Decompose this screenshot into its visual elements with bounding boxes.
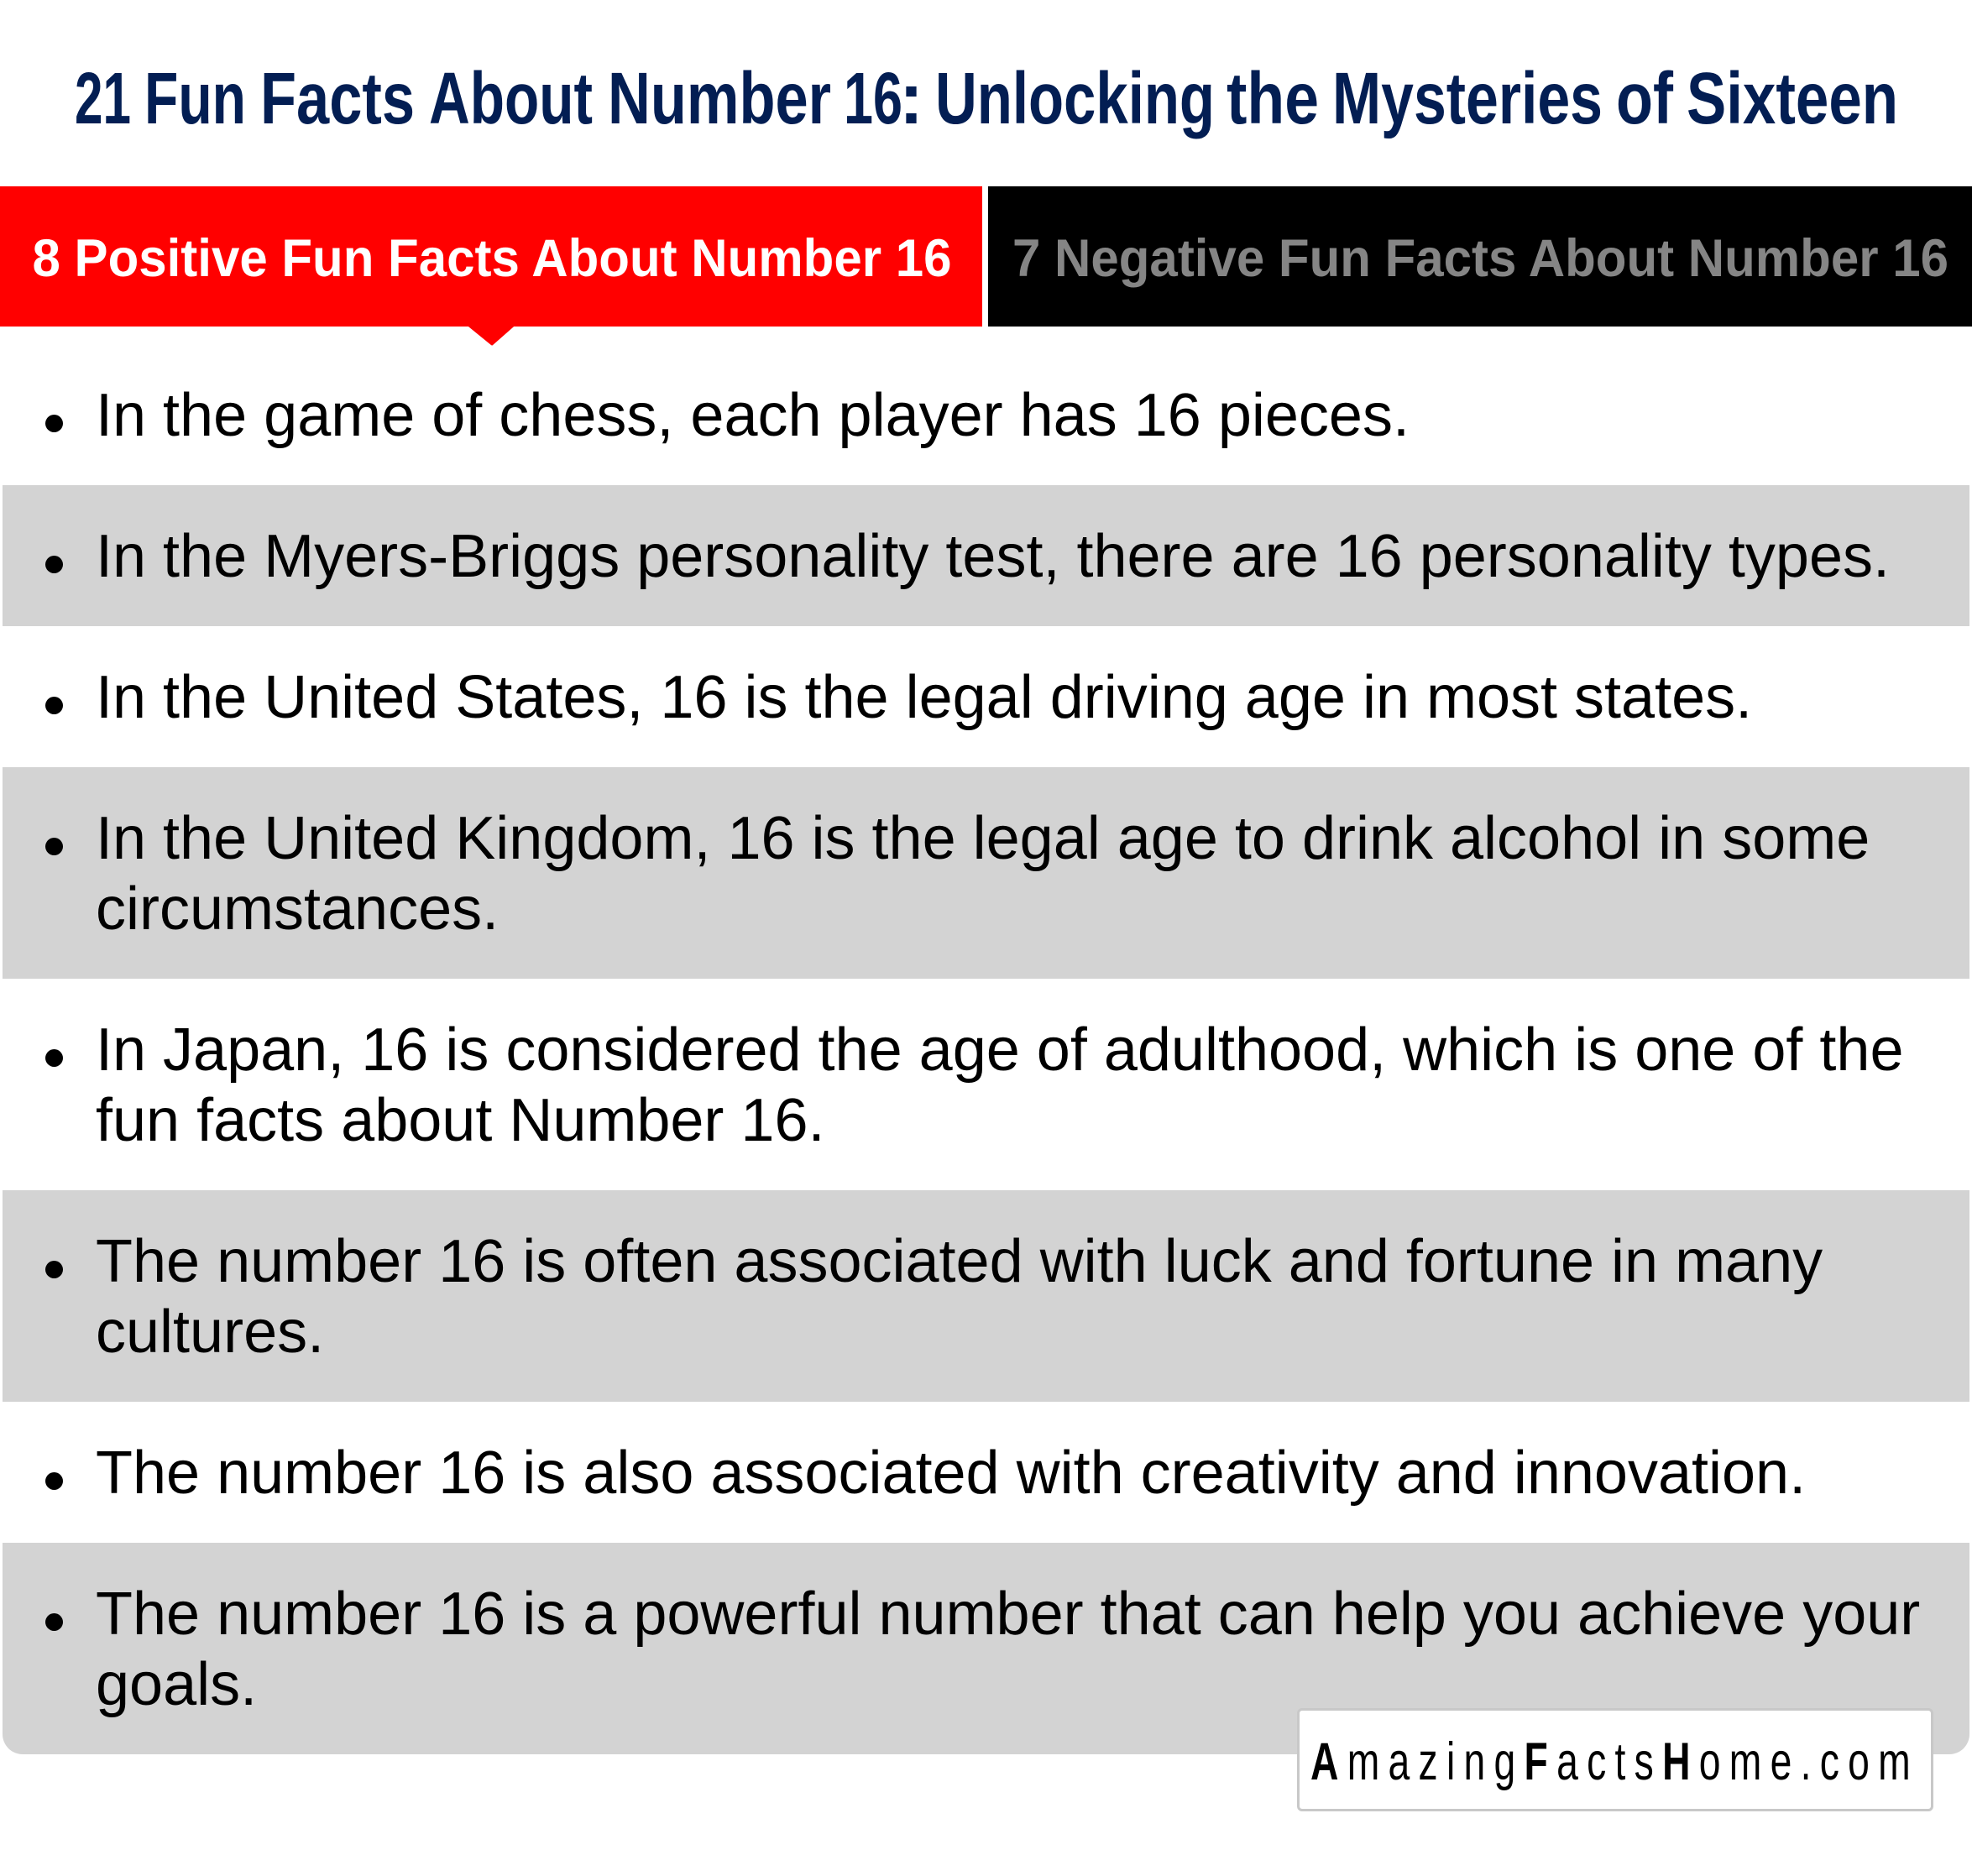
fact 5 bbox=[45, 1016, 1904, 1154]
tab: positive facts: 8 Positive Fun Facts About Number 16 bbox=[32, 229, 952, 288]
title: Number bbox=[608, 58, 831, 139]
tab: negative facts bbox=[988, 186, 1972, 326]
watermark bbox=[1297, 1708, 1933, 1811]
title: About bbox=[429, 58, 593, 139]
fact 6: cultures. bbox=[96, 1299, 324, 1366]
fact 7: The number 16 is also associated with creativity and innovation. bbox=[96, 1440, 1806, 1507]
tab: positive facts bbox=[0, 186, 982, 326]
title: Fun bbox=[144, 58, 246, 139]
fact 4: circumstances. bbox=[96, 875, 499, 943]
fact 8: goals. bbox=[96, 1651, 257, 1718]
title: Facts bbox=[260, 58, 415, 139]
title: Unlocking bbox=[935, 58, 1215, 139]
title: : bbox=[899, 58, 923, 139]
fact 1: In the game of chess, each player has 16 pieces. bbox=[96, 382, 1410, 449]
title: 16 bbox=[844, 58, 902, 139]
title bbox=[75, 58, 1898, 139]
fact 8: The number 16 is a powerful number that can help you achieve your bbox=[96, 1581, 1920, 1648]
fact 4 bbox=[3, 767, 1969, 979]
fact 2: In the Myers-Briggs personality test, there are 16 personality types. bbox=[96, 523, 1890, 590]
title: Mysteries bbox=[1332, 58, 1603, 139]
title: the bbox=[1227, 58, 1319, 139]
fact 5: fun facts about Number 16. bbox=[96, 1087, 824, 1154]
fact 6: The number 16 is often associated with luck and fortune in many bbox=[96, 1228, 1823, 1295]
title: 21 bbox=[75, 58, 131, 139]
fact 2 bbox=[3, 485, 1969, 626]
fact 6 bbox=[3, 1190, 1969, 1402]
fact 3: In the United States, 16 is the legal driving age in most states. bbox=[96, 664, 1752, 731]
fact 5: In Japan, 16 is considered the age of adulthood, which is one of the bbox=[96, 1016, 1904, 1084]
fact 8 bbox=[3, 1543, 1969, 1754]
title: of bbox=[1616, 58, 1674, 139]
title: Sixteen bbox=[1687, 58, 1898, 139]
tab pointer arrow bbox=[468, 327, 514, 346]
fact 4: In the United Kingdom, 16 is the legal age to drink alcohol in some bbox=[96, 805, 1870, 872]
tab: negative facts: 7 Negative Fun Facts About Number 16 bbox=[1012, 229, 1948, 288]
